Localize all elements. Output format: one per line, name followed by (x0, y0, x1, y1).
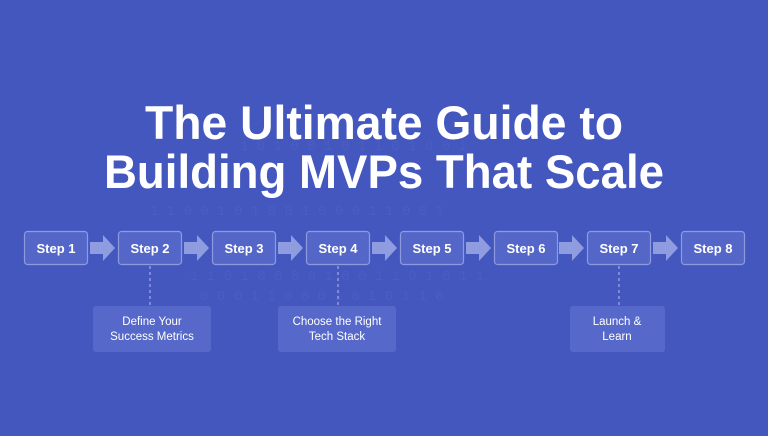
arrows (90, 235, 678, 261)
text: 1 1 0 1 0 0 0 0 1 0 0 1 1 0 1 0 1 1 (190, 269, 484, 285)
title: The Ultimate Guide to (145, 96, 623, 149)
step labels: Step 1 (36, 241, 76, 256)
step labels: Step 4 (318, 241, 358, 256)
text: 1 1 0 0 1 0 1 0 0 1 0 0 0 1 1 0 0 1 (150, 204, 444, 220)
callout text: Define Your (122, 316, 182, 328)
step labels: Step 6 (506, 241, 546, 256)
title: Building MVPs That Scale (104, 145, 664, 198)
text: 0 0 0 1 1 0 0 0 1 0 1 0 1 1 0 (200, 289, 444, 305)
callout text: Launch & (593, 316, 642, 328)
callout text: Choose the Right (293, 316, 382, 328)
step labels (36, 241, 733, 256)
callout boxes (93, 306, 665, 352)
callout text: Learn (602, 331, 632, 343)
callout text (110, 316, 642, 343)
step boxes (24, 232, 744, 264)
text: 1 0 1 0 0 1 0 1 1 0 1 0 0 1 (240, 139, 467, 155)
step labels: Step 2 (130, 241, 170, 256)
callout text: Success Metrics (110, 331, 194, 343)
step labels: Step 5 (412, 241, 452, 256)
connectors (150, 266, 619, 305)
title (104, 96, 664, 198)
step labels: Step 8 (693, 241, 733, 256)
step labels: Step 7 (599, 241, 639, 256)
step labels: Step 3 (224, 241, 264, 256)
callout text: Tech Stack (309, 331, 365, 343)
